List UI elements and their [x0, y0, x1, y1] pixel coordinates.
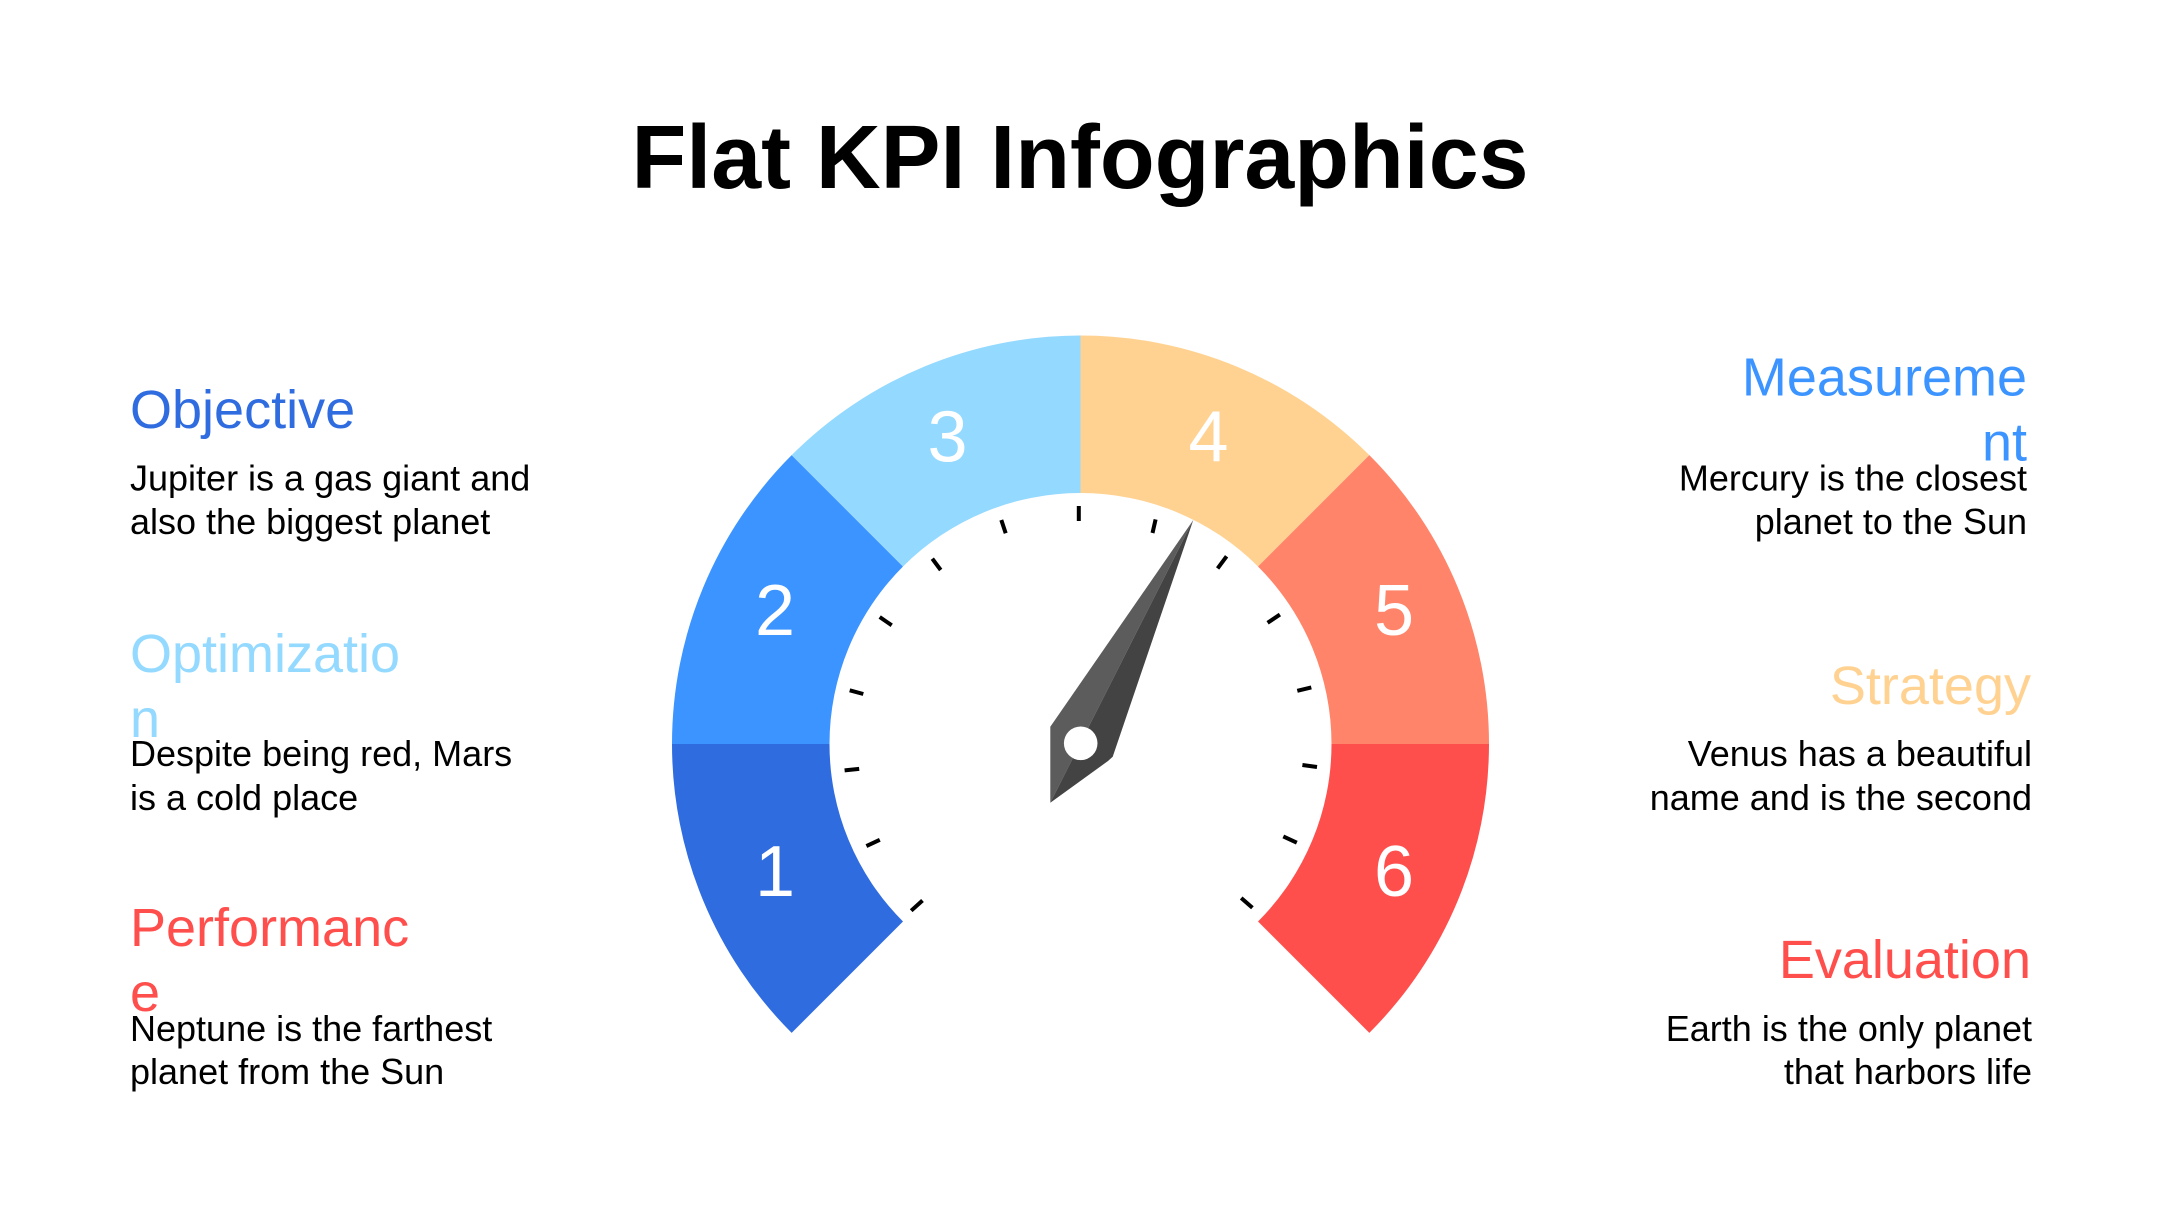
item: Objective: [130, 380, 530, 542]
item: Strategy: Strategy: [1830, 656, 2031, 716]
segment 5: [1258, 455, 1489, 744]
segment 3: [792, 336, 1080, 566]
item: Optimization: [130, 624, 512, 818]
title: Flat KPI Infographics: [632, 108, 1528, 208]
item: Optimization: is a cold place: [130, 777, 358, 818]
item: Strategy: name and is the second: [1650, 777, 2032, 818]
item: Objective: Objective: [130, 380, 355, 440]
item: Performance: [130, 898, 492, 1092]
segment 4: [1080, 336, 1369, 566]
segment 1: [672, 744, 903, 1033]
segment 1: 1: [755, 832, 795, 912]
item: Measurement: Measureme: [1742, 348, 2027, 408]
item: Performance: planet from the Sun: [130, 1051, 444, 1092]
item: Objective: Jupiter is a gas giant and: [130, 458, 530, 498]
item: Optimization: n: [130, 689, 160, 749]
segment 6: 6: [1374, 832, 1414, 912]
item: Evaluation: that harbors life: [1784, 1051, 2032, 1092]
item: Optimization: Optimizatio: [130, 624, 400, 684]
segment 2: 2: [755, 571, 795, 651]
item: Strategy: Venus has a beautiful: [1688, 733, 2032, 774]
segment 3: 3: [927, 398, 968, 478]
item: Performance: e: [130, 963, 160, 1023]
item: Measurement: nt: [1982, 412, 2027, 472]
item: Strategy: [1650, 656, 2032, 818]
item: Performance: Performanc: [130, 898, 409, 958]
segment 6: [1258, 744, 1489, 1033]
item: Evaluation: [1666, 930, 2032, 1092]
needle: [1050, 520, 1193, 803]
segment 5: 5: [1374, 571, 1414, 651]
item: Evaluation: Earth is the only planet: [1666, 1008, 2032, 1049]
gauge tick marks: [845, 506, 1317, 911]
item: Optimization: Despite being red, Mars: [130, 733, 512, 774]
item: Objective: also the biggest planet: [130, 501, 490, 542]
segment 2: [672, 455, 903, 744]
item: Measurement: Mercury is the closest: [1679, 458, 2027, 498]
gauge chart: [672, 336, 1489, 1033]
item: Measurement: planet to the Sun: [1755, 501, 2027, 542]
item: Performance: Neptune is the farthest: [130, 1008, 492, 1049]
segment 4: 4: [1188, 398, 1229, 478]
item: Measurement: [1679, 348, 2027, 542]
item: Evaluation: Evaluation: [1779, 930, 2031, 990]
